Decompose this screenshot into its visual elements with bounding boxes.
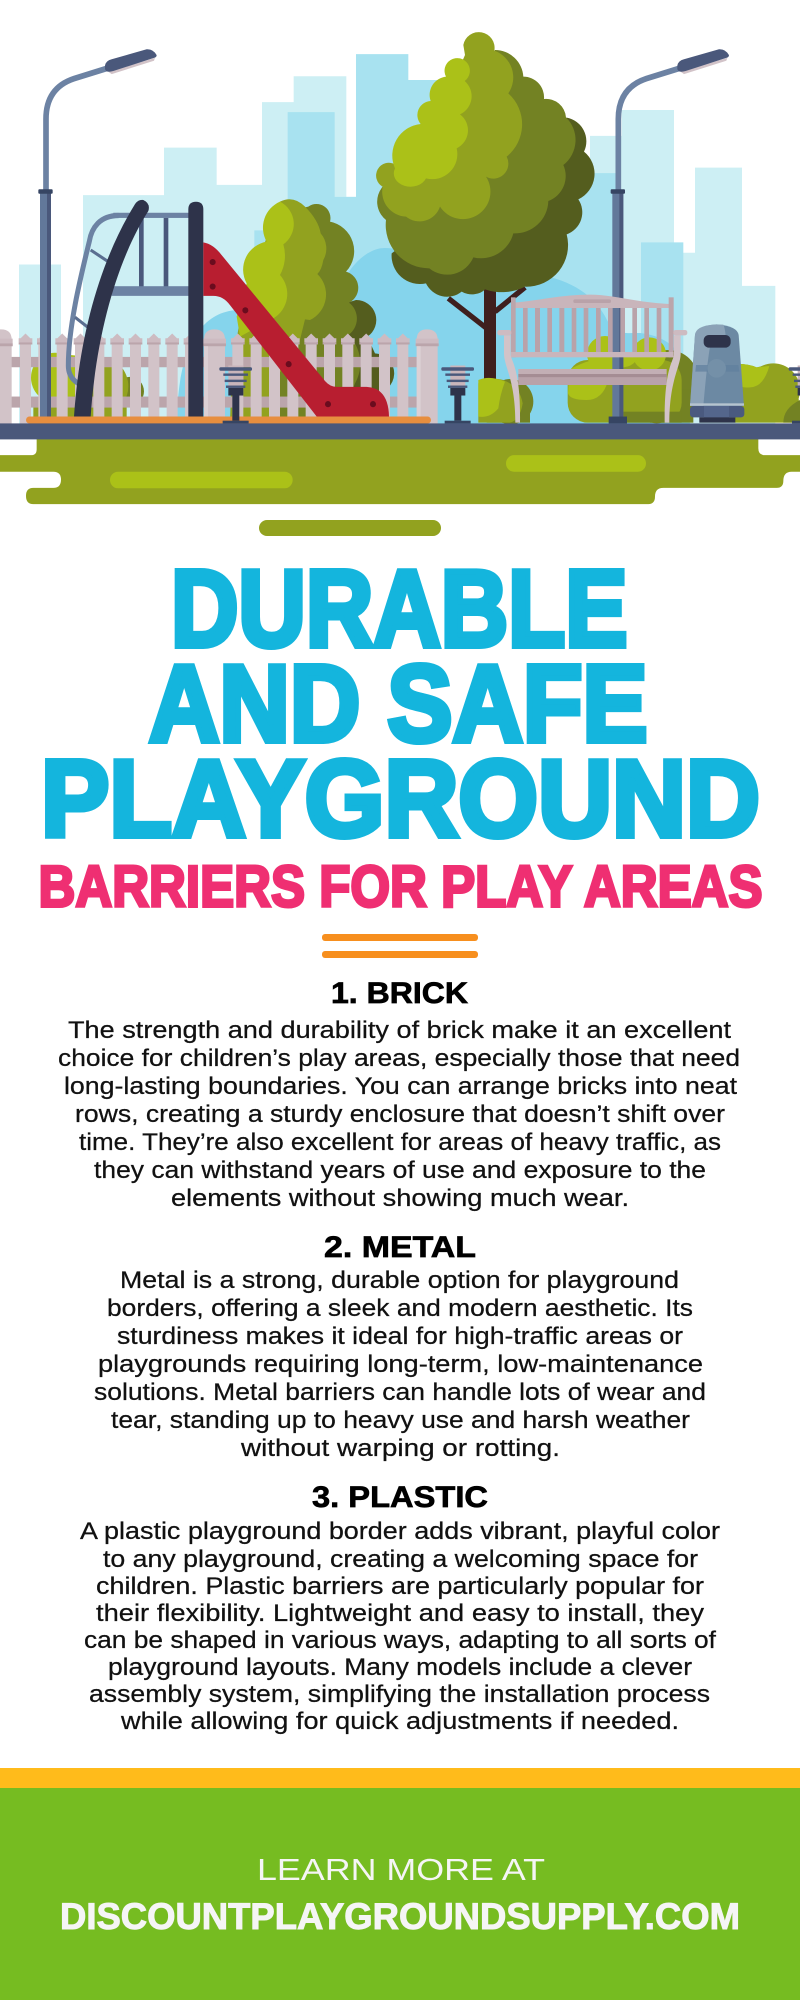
- body: metal: Metal is a strong, durable option for playground: [120, 1267, 679, 1294]
- heading: 1. Brick: 1. BRICK: [331, 977, 468, 1010]
- city skyline: [19, 54, 775, 423]
- body: brick: The strength and durability of brick make it an excellent: [68, 1017, 731, 1044]
- body: metal: [94, 1267, 706, 1462]
- body: plastic: [80, 1518, 720, 1735]
- bush right of bin: [735, 363, 800, 423]
- sand strip: [26, 417, 431, 423]
- garden lamp 1: [219, 366, 252, 423]
- heading: 2. Metal: 2. METAL: [324, 1231, 476, 1264]
- left bush: [31, 353, 144, 423]
- climbing frame: [68, 200, 203, 417]
- bushes by the bench: [478, 336, 800, 424]
- body: brick: time. They’re also excellent for areas of heavy traffic, as: [79, 1129, 721, 1156]
- body: plastic: can be shaped in various ways, adapting to all sorts of: [84, 1627, 716, 1654]
- body: plastic: children. Plastic barriers are particularly popular for: [96, 1573, 704, 1600]
- body: brick: choice for children’s play areas, especially those that need: [58, 1045, 740, 1072]
- road: [0, 423, 800, 439]
- picket fence: [0, 329, 439, 423]
- garden lamp 2: [441, 366, 474, 423]
- crown: [376, 32, 595, 297]
- title: [41, 548, 760, 860]
- illustration: playground scene: [0, 32, 800, 504]
- large tree: [376, 32, 595, 382]
- gold stripe: [0, 1768, 800, 1788]
- trash bin: [690, 324, 744, 423]
- body: plastic: assembly system, simplifying the installation process: [89, 1681, 710, 1708]
- bush left of bench: [478, 378, 533, 424]
- red slide: [203, 242, 389, 417]
- grass ground: [0, 439, 800, 504]
- title: DURABLE: [171, 548, 628, 670]
- heading: 3. Plastic: 3. PLASTIC: [312, 1481, 488, 1514]
- body: brick: rows, creating a sturdy enclosure that doesn’t shift over: [75, 1101, 725, 1128]
- body: metal: solutions. Metal barriers can handle lots of wear and: [94, 1379, 706, 1406]
- body: plastic: playground layouts. Many models include a clever: [108, 1654, 692, 1681]
- grass highlight right: [506, 455, 646, 472]
- call to action: LEARN MORE AT: [257, 1852, 545, 1887]
- body: brick: long-lasting boundaries. You can arrange bricks into neat: [64, 1073, 737, 1100]
- bench: [497, 295, 687, 423]
- footer band: [0, 1768, 800, 2000]
- decorative pill under the scene: [259, 520, 441, 536]
- section 3: plastic: [80, 1481, 720, 1735]
- body: metal: without warping or rotting.: [240, 1435, 560, 1462]
- orange divider: [322, 934, 478, 958]
- body: metal: tear, standing up to heavy use and harsh weather: [111, 1407, 690, 1434]
- body: plastic: their flexibility. Lightweight and easy to install, they: [96, 1600, 704, 1627]
- body: brick: they can withstand years of use and exposure to the: [94, 1157, 706, 1184]
- green panel: [0, 1788, 800, 2000]
- body: plastic: while allowing for quick adjustments if needed.: [120, 1708, 679, 1735]
- body: brick: elements without showing much wear.: [171, 1185, 629, 1212]
- background hills: [177, 248, 690, 424]
- body: brick: [58, 1017, 740, 1212]
- website: DISCOUNTPLAYGROUNDSUPPLY.COM: [60, 1896, 740, 1937]
- bush behind bench: [568, 336, 698, 423]
- left street lamp: [38, 49, 157, 417]
- body: plastic: A plastic playground border adds vibrant, playful color: [80, 1518, 720, 1545]
- right street lamp: [609, 49, 729, 423]
- trunk: [448, 287, 525, 382]
- street lamps, climbing frame and slide: [26, 49, 800, 423]
- body: metal: sturdiness makes it ideal for high-traffic areas or: [117, 1323, 683, 1350]
- garden lamp 3: [789, 366, 800, 423]
- title: PLAYGROUND: [41, 738, 760, 860]
- section 2: metal: [94, 1231, 706, 1462]
- body: plastic: to any playground, creating a welcoming space for: [103, 1546, 698, 1573]
- title: AND SAFE: [149, 643, 648, 765]
- section 1: brick: [58, 977, 740, 1212]
- body: metal: borders, offering a sleek and modern aesthetic. Its: [107, 1295, 693, 1322]
- small tree: [230, 199, 394, 423]
- grass highlight left: [110, 472, 293, 488]
- body: metal: playgrounds requiring long-term, low-maintenance: [98, 1351, 703, 1378]
